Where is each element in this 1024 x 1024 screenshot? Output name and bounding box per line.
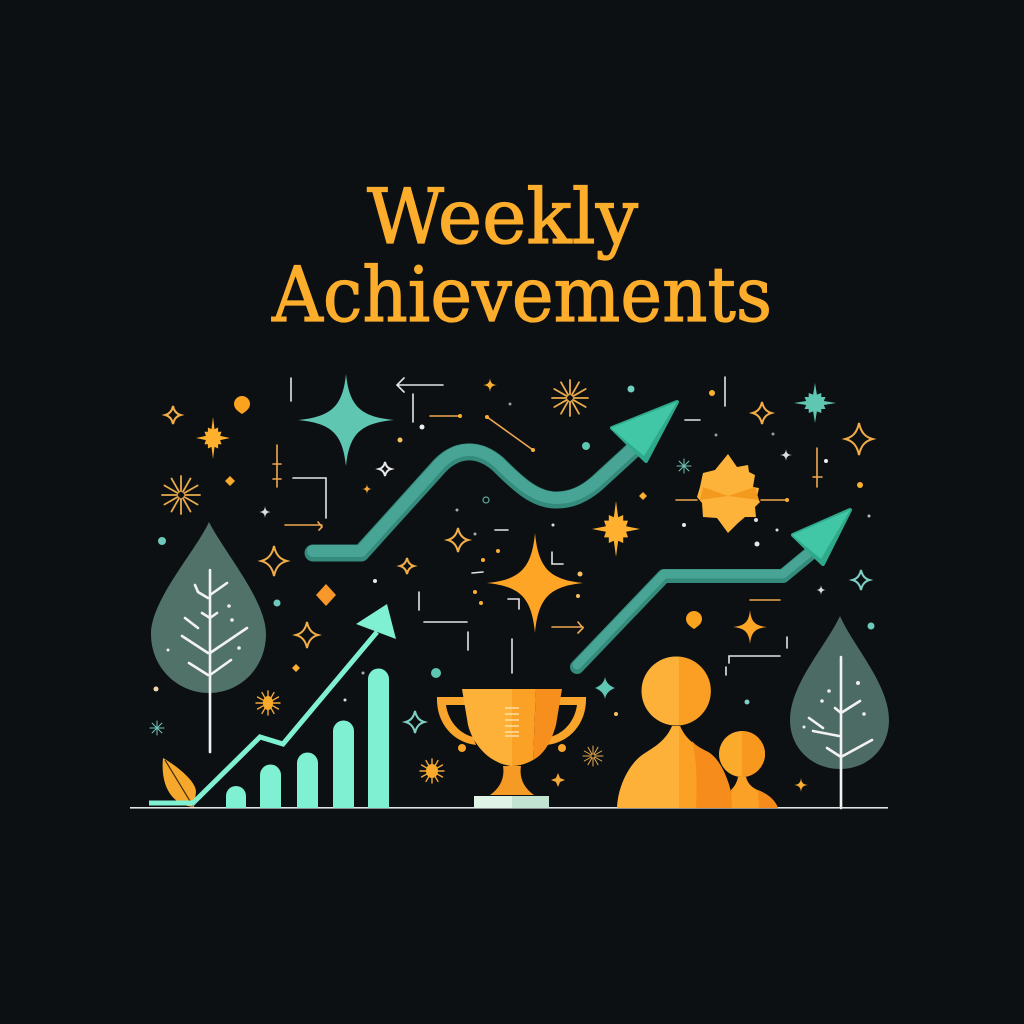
spiky teal star bbox=[794, 383, 836, 423]
left tree bbox=[151, 522, 266, 752]
bar chart bbox=[226, 668, 389, 808]
title bbox=[271, 172, 772, 339]
trophy markings bbox=[505, 708, 519, 736]
sunburst badge bbox=[697, 454, 760, 533]
trophy cup bbox=[462, 689, 512, 766]
small diamonds and plus sparkles bbox=[225, 378, 826, 792]
background sparkles and stars bbox=[150, 374, 874, 792]
trophy stem bbox=[490, 766, 534, 795]
trophy base bbox=[474, 796, 512, 808]
leaf bbox=[163, 758, 196, 807]
upper teal arrow bbox=[313, 402, 677, 553]
trophy handles bbox=[437, 697, 586, 745]
lower teal arrow bbox=[577, 510, 850, 667]
large person bbox=[617, 656, 734, 808]
small orange four-point star bbox=[733, 610, 767, 644]
dots bbox=[154, 386, 874, 775]
large orange four-point star bbox=[487, 533, 583, 633]
orange drop pins bbox=[234, 396, 702, 629]
right tree bbox=[790, 616, 889, 808]
firework bursts bbox=[150, 380, 691, 766]
teal four-point star bbox=[298, 374, 394, 466]
title: Weekly bbox=[367, 172, 638, 261]
bug-shaped orange sparks bbox=[256, 691, 565, 787]
spiky orange star left bbox=[196, 417, 230, 459]
title: Achievements bbox=[271, 250, 772, 339]
outline stars bbox=[165, 402, 873, 733]
ground line bbox=[130, 807, 888, 809]
small person bbox=[719, 731, 778, 808]
thin tech lines bbox=[273, 377, 822, 675]
spiky orange star centre bbox=[592, 501, 640, 557]
rising trend arrow bbox=[149, 604, 396, 803]
trophy beads bbox=[458, 744, 466, 752]
trophy bbox=[437, 689, 586, 808]
